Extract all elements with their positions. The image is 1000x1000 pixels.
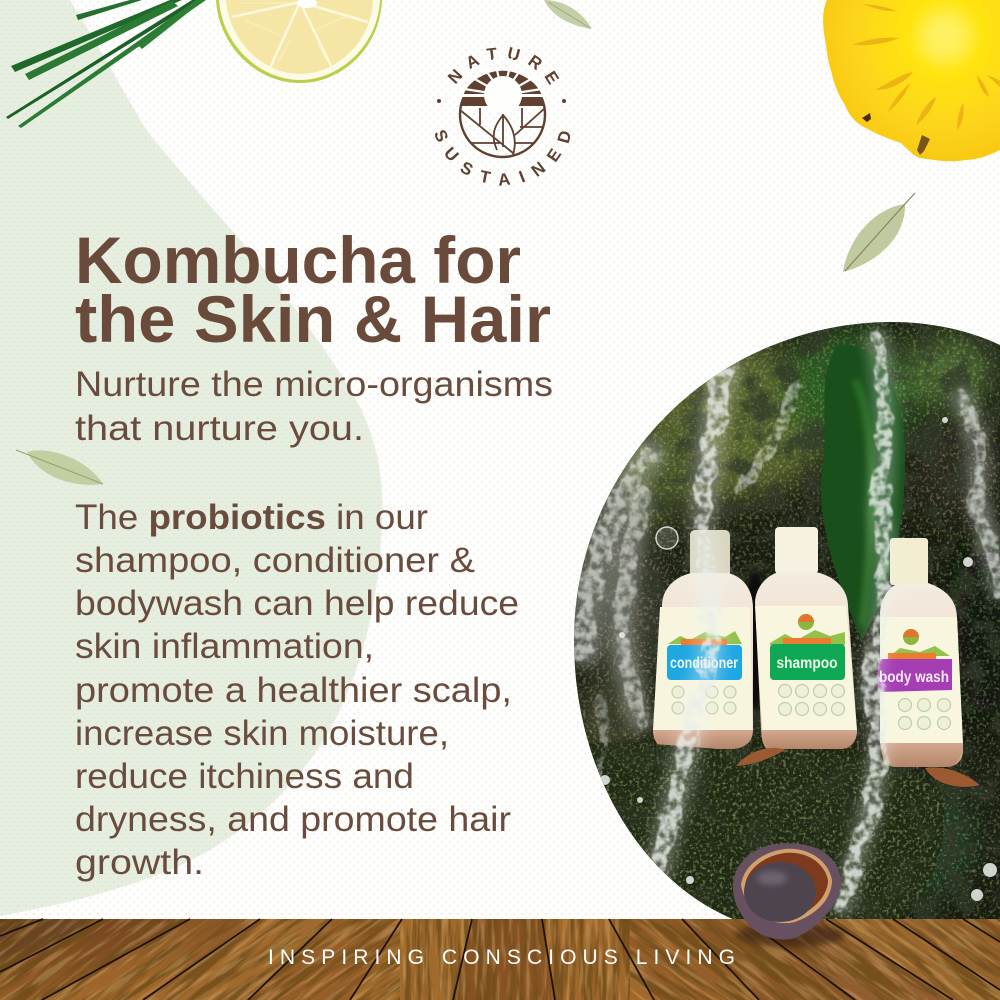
icon: pineapple slice xyxy=(823,0,1000,161)
body text: skin inflammation, xyxy=(75,627,374,666)
body text: increase skin moisture, xyxy=(75,714,449,753)
subheading xyxy=(75,365,553,448)
mossy rock background xyxy=(582,330,1000,895)
icon: small leaf top xyxy=(544,0,592,29)
body text: shampoo, conditioner & xyxy=(75,541,475,580)
heading xyxy=(75,223,551,356)
icon: body wash bottle: body wash xyxy=(879,669,949,686)
soft green curved panel xyxy=(0,0,382,916)
body text: dryness, and promote hair xyxy=(75,800,511,839)
heading: Kombucha for xyxy=(75,223,521,297)
heading: the Skin & Hair xyxy=(75,282,551,356)
body text xyxy=(75,498,519,882)
subheading: that nurture you. xyxy=(75,409,364,448)
tagline: INSPIRING CONSCIOUS LIVING xyxy=(268,946,735,969)
wood floor xyxy=(0,919,1000,1000)
green leaf xyxy=(821,345,905,640)
body text: The probiotics in our xyxy=(75,498,428,537)
body text: bodywash can help reduce xyxy=(75,584,519,623)
logo: Nature Sustained: SUSTAINED xyxy=(435,130,570,186)
body text: growth. xyxy=(75,843,204,882)
icon: shampoo bottle xyxy=(755,527,857,749)
body text: reduce itchiness and xyxy=(75,757,414,796)
icon: body wash bottle xyxy=(878,538,963,767)
icon: conditioner bottle xyxy=(653,530,753,749)
icon: falling leaf left xyxy=(16,450,103,485)
body text: promote a healthier scalp, xyxy=(75,671,512,710)
subheading: Nurture the micro-organisms xyxy=(75,365,553,404)
icon: shampoo bottle: shampoo xyxy=(776,655,838,672)
water streams xyxy=(583,340,1000,905)
photo: bottles under waterfall xyxy=(570,320,1000,920)
icon: lemon slice xyxy=(216,0,382,83)
icon: chives xyxy=(6,0,206,128)
logo: Nature Sustained xyxy=(435,47,570,186)
icon: conditioner bottle: conditioner xyxy=(670,655,738,672)
icon: falling leaf right xyxy=(843,193,915,272)
icon: soap nut shell xyxy=(733,843,841,939)
mossy ledge xyxy=(578,738,980,919)
logo: Nature Sustained: NATURE xyxy=(447,47,560,85)
water haze xyxy=(583,340,1000,905)
